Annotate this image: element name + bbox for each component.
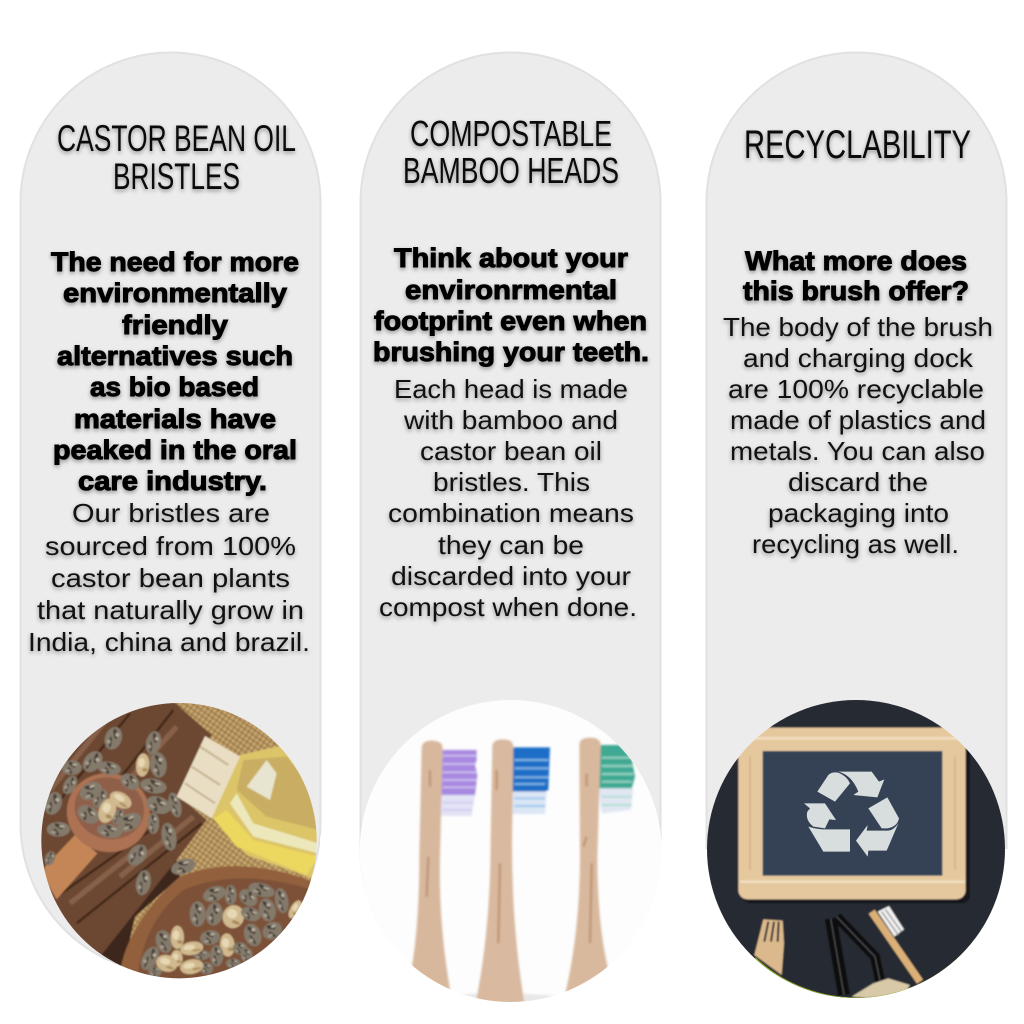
text block: bamboo lead: footprint even when [374, 306, 647, 336]
panel: castor bean oil bristles [20, 52, 340, 987]
text block: recyclability body: recycling as well. [752, 529, 959, 559]
heading: castor bean oil bristles: CASTOR BEAN OIL [57, 118, 296, 159]
text block: recyclability lead: What more does [745, 246, 967, 276]
panel background: castor bean [20, 52, 320, 974]
text block: castor bean lead: The need for more [51, 247, 299, 277]
text block: recyclability body: packaging into [768, 498, 949, 528]
text block: bamboo body [379, 374, 637, 622]
text block: bamboo body: Each head is made [394, 374, 628, 404]
text block: castor bean lead: peaked in the oral [53, 435, 297, 465]
text block: recyclability body: The body of the brush [723, 312, 993, 342]
text block: castor bean lead: environmentally [63, 278, 287, 308]
heading: castor bean oil bristles: BRISTLES [113, 156, 240, 197]
heading: compostable bamboo heads [403, 113, 619, 191]
text block: recyclability body: discard the [788, 467, 928, 497]
text block: castor bean lead [51, 247, 299, 496]
accent: green arc [755, 943, 973, 999]
icon: recycling symbol [804, 772, 899, 857]
text block: castor bean lead: alternatives such [57, 341, 293, 371]
panel: recyclability [703, 52, 1010, 1003]
text block: bamboo body: compost when done. [379, 592, 637, 622]
text block: castor bean body: Our bristles are [72, 498, 270, 528]
image: chalkboard with recycling symbol and eco utensils [703, 697, 1010, 1003]
text block: castor bean body: that naturally grow in [37, 595, 304, 625]
text block: recyclability body: and charging dock [743, 343, 974, 373]
text block: recyclability body [723, 312, 993, 559]
text block: bamboo lead: Think about your [394, 243, 629, 273]
text block: castor bean lead: materials have [74, 404, 276, 434]
text block: bamboo body: combination means [388, 498, 634, 528]
text block: castor bean body [28, 498, 310, 657]
text block: bamboo body: with bamboo and [403, 405, 618, 435]
text block: castor bean body: castor bean plants [51, 563, 290, 593]
text block: recyclability lead: this brush offer? [743, 276, 969, 306]
image: castor beans, spoon and oil bottle [41, 703, 321, 978]
panel background: bamboo [360, 52, 660, 1000]
heading: compostable bamboo heads: BAMBOO HEADS [403, 150, 619, 191]
panel: compostable bamboo heads [360, 52, 662, 1017]
text block: recyclability body: are 100% recyclable [728, 374, 984, 404]
image: three bamboo toothbrush heads [360, 700, 662, 1017]
text block: castor bean lead: friendly [122, 310, 228, 340]
heading: compostable bamboo heads: COMPOSTABLE [410, 113, 612, 154]
panel background: recyclability [706, 52, 1006, 1000]
text block: recyclability lead [743, 246, 969, 306]
heading: castor bean oil bristles [57, 118, 296, 197]
text block: recyclability body: metals. You can also [730, 436, 985, 466]
text block: bamboo lead: brushing your teeth. [373, 337, 649, 367]
text block: castor bean lead: care industry. [78, 466, 267, 496]
text block: bamboo body: bristles. This [433, 467, 590, 497]
text block: castor bean body: India, china and brazil. [28, 627, 310, 657]
text block: bamboo body: discarded into your [391, 561, 631, 591]
text block: bamboo lead: environrmental [405, 275, 617, 305]
text block: recyclability body: made of plastics and [730, 405, 986, 435]
text block: bamboo lead [373, 243, 649, 367]
text block: castor bean lead: as bio based [90, 372, 259, 402]
text block: bamboo body: castor bean oil [420, 436, 602, 466]
text block: castor bean body: sourced from 100% [45, 531, 296, 561]
text block: bamboo body: they can be [438, 530, 584, 560]
